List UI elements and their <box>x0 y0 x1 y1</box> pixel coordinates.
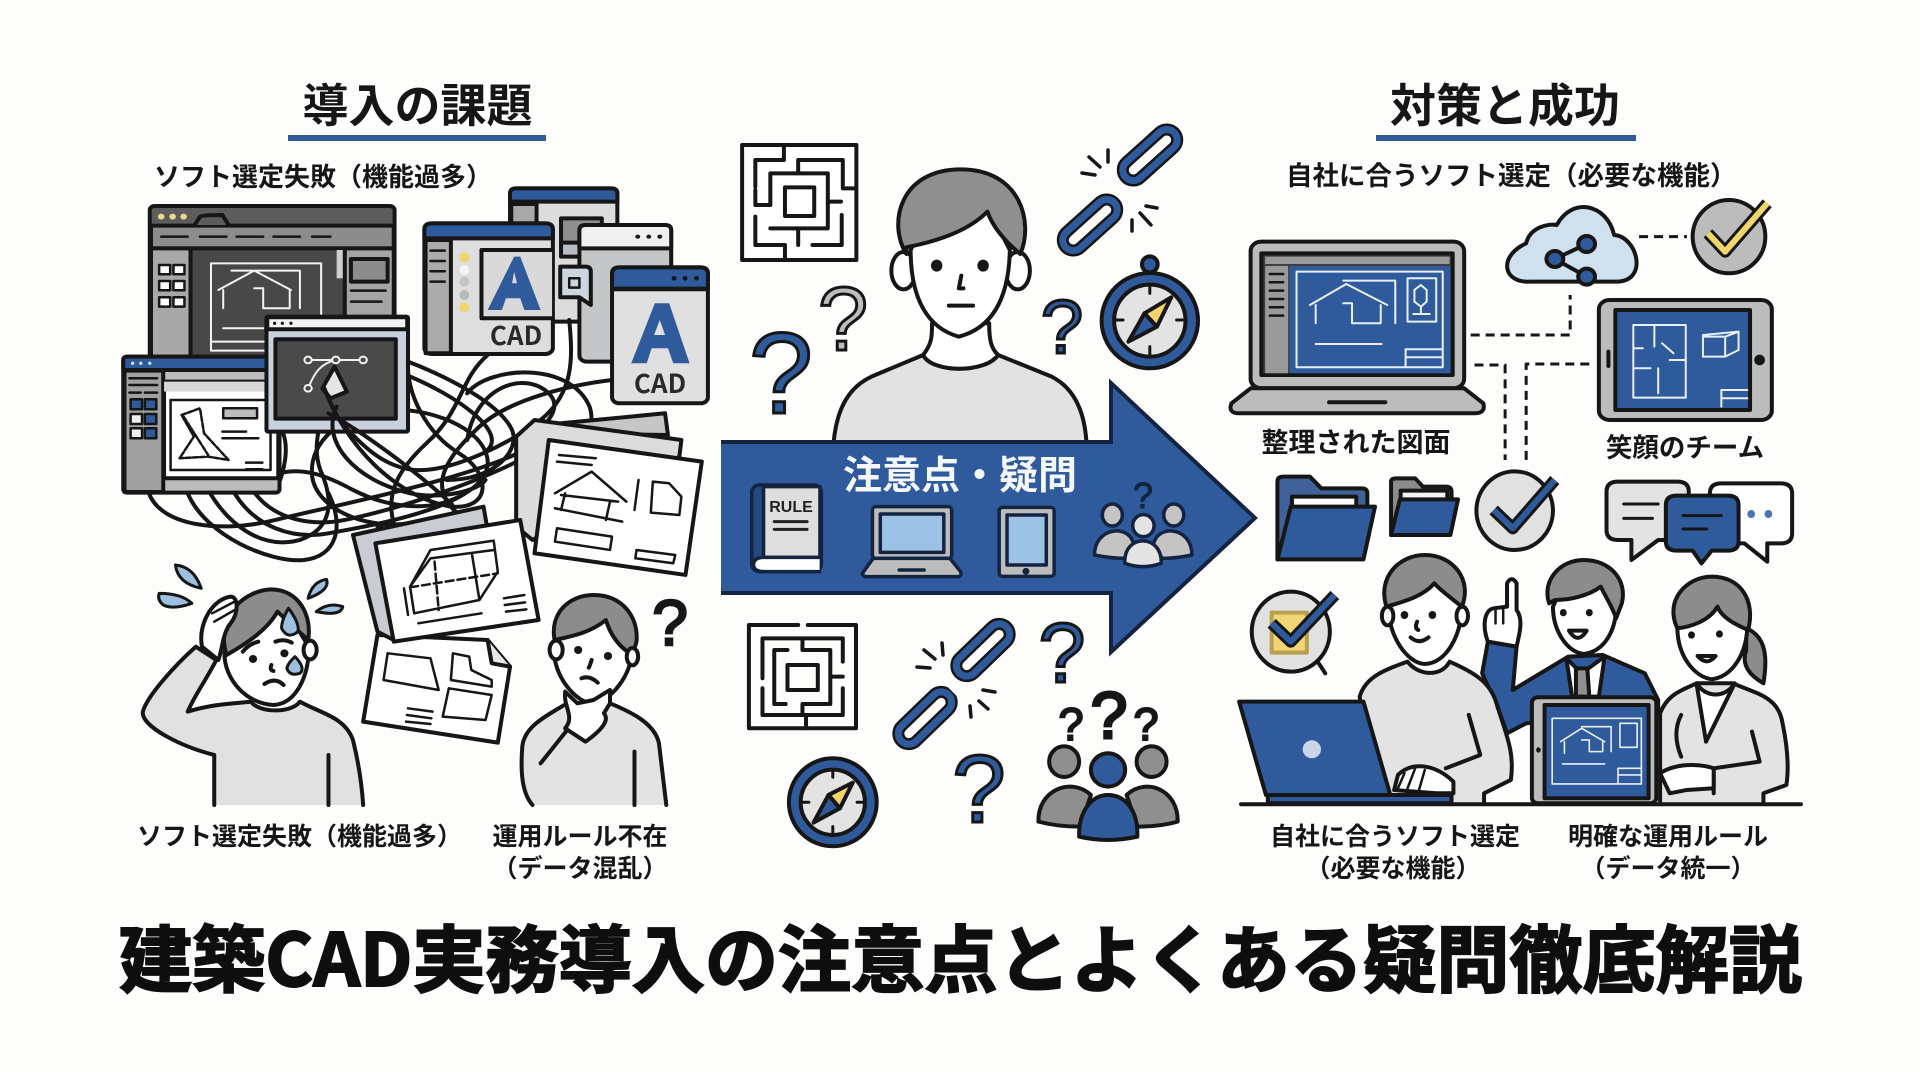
label: unified data: （データ統一） <box>1580 854 1756 883</box>
panel: drawings and worried people <box>143 507 666 805</box>
heading: 導入の課題: 導入の課題 <box>302 80 532 132</box>
icon: grey browser window <box>579 225 671 362</box>
person: man in suit pointing <box>1482 560 1658 733</box>
document: tilted isometric plan sheet <box>353 507 539 642</box>
icon: CAD window with A logo <box>424 223 553 354</box>
icon: small comment tag <box>560 267 591 305</box>
icon: back browser window <box>510 188 617 322</box>
icon: compass bottom <box>789 758 877 846</box>
panel: CAD software windows and tangled wires <box>123 188 708 575</box>
person: thinking man with hand on chin <box>522 595 666 805</box>
icon: black question mark left: ? <box>1058 699 1084 750</box>
icon: CAD window front right <box>612 267 708 403</box>
label: clear operation rules: 明確な運用ルール <box>1568 823 1768 851</box>
icon: broken chain top <box>1058 125 1182 255</box>
label: CAD on middle window: CAD <box>490 316 542 353</box>
icon: question mark below arrow head: ? <box>1039 606 1085 700</box>
icon: small blue question mark: ? <box>1041 285 1083 370</box>
icon: speech bubbles <box>1607 482 1792 563</box>
person: woman with ponytail <box>1660 577 1788 803</box>
label: CAD on right window: CAD <box>634 364 686 401</box>
icon: broken chain bottom <box>894 620 1014 748</box>
icon: black question mark right: ? <box>1133 699 1159 750</box>
label: RULE on book: RULE <box>769 499 813 516</box>
label: smiling team: 笑顔のチーム <box>1606 433 1764 463</box>
label: missing operation rules: 運用ルール不在 <box>492 823 668 851</box>
icon: grey question mark: ? <box>818 270 868 370</box>
icon: blue check circle <box>1476 471 1555 550</box>
document: folded plan sheet <box>363 635 510 743</box>
subheading: software selection failure: ソフト選定失敗（機能過多） <box>154 162 492 192</box>
desk line <box>1241 802 1801 806</box>
panel: devices and cloud <box>1231 200 1772 460</box>
label: necessary features: （必要な機能） <box>1305 855 1481 883</box>
icon: group of people <box>1094 504 1192 567</box>
subheading: choose suitable software: 自社に合うソフト選定（必要な機能） <box>1286 161 1736 191</box>
icon: checkbox badge <box>1252 592 1335 673</box>
icon: cloud with share nodes <box>1507 207 1637 285</box>
connector: dashed lines <box>1471 237 1687 460</box>
icon: large dark CAD window <box>150 206 395 363</box>
label: organised drawings: 整理された図面 <box>1262 428 1450 458</box>
icon: sweat drops <box>159 565 343 674</box>
icon: black question mark near thinking man: ? <box>652 587 688 659</box>
icon: laptop <box>862 507 961 577</box>
icon: rule book <box>752 485 821 572</box>
icon: group with questions <box>1038 746 1178 840</box>
panel: centre bottom icons <box>749 625 1178 846</box>
icon: large folder <box>1277 477 1375 559</box>
panel: team and tools <box>1239 471 1801 804</box>
wires: tangle under windows <box>149 400 524 560</box>
icon: bezier tool window <box>266 317 408 432</box>
icons inside arrow <box>752 485 1192 577</box>
person: worried man holding head <box>143 589 363 805</box>
person: man typing on laptop <box>1360 555 1512 803</box>
icon: small question mark above group: ? <box>1133 475 1153 516</box>
panel: centre top person and icons <box>742 145 1198 440</box>
heading: 注意点・疑問: 注意点・疑問 <box>843 455 1077 498</box>
icon: small folder <box>1391 478 1458 535</box>
icon: compass <box>1102 256 1198 368</box>
label: data confusion: （データ混乱） <box>492 854 668 883</box>
icon: left application window <box>123 357 280 493</box>
title: 建築CAD実務導入の注意点とよくある疑問徹底解説 <box>119 902 1802 1008</box>
icon: tablet <box>999 507 1054 576</box>
icon: question mark by compass: ? <box>952 736 1006 843</box>
icon: maze <box>742 145 856 260</box>
label: software selection failure: ソフト選定失敗（機能過多） <box>137 823 462 851</box>
wires: tangle over windows <box>324 320 612 531</box>
label: choose suitable software bottom: 自社に合うソフト選定 <box>1270 823 1520 851</box>
icon: tablet with floor plan <box>1599 300 1772 420</box>
icon: blue laptop <box>1239 702 1452 803</box>
icon: large blue question mark: ? <box>749 310 813 438</box>
icon: maze bottom <box>749 625 856 728</box>
person: confused man <box>834 169 1086 440</box>
document: top drawing sheet stack <box>516 413 702 575</box>
icon: yellow check circle <box>1693 200 1767 273</box>
icon: tablet with blueprint <box>1532 697 1656 803</box>
icon: laptop with blueprint <box>1231 242 1484 413</box>
arrow: central blue arrow <box>721 383 1255 652</box>
icon: black question mark centre: ? <box>1091 678 1127 752</box>
heading: 対策と成功: 対策と成功 <box>1390 80 1620 132</box>
